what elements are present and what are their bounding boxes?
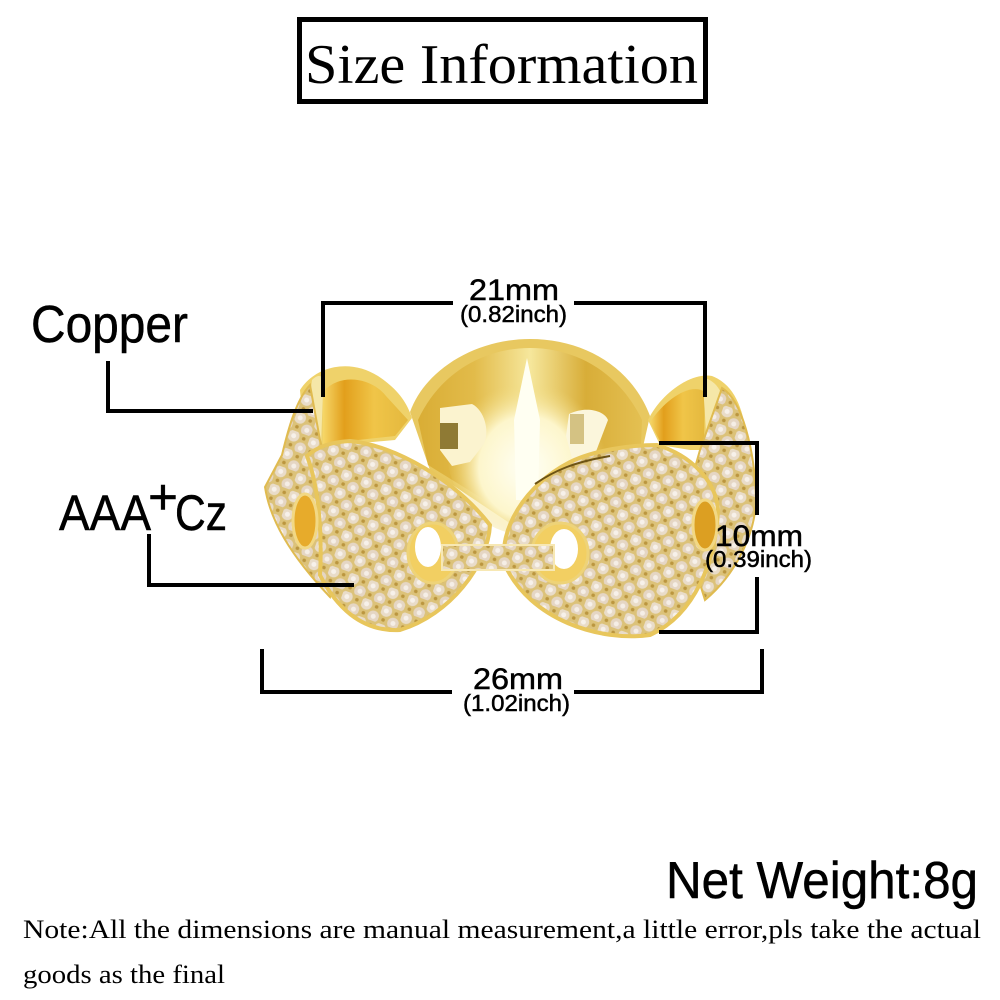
left side link hole [293, 494, 317, 548]
dimension: 21mm: (0.82inch) [460, 301, 567, 327]
large left link [307, 441, 490, 630]
note: Note:All the dimensions are manual measurement,a little error,pls take the actual [23, 915, 981, 944]
title: Size Information [305, 34, 698, 96]
left cream band [308, 376, 324, 452]
back band arch [410, 339, 650, 530]
left side link [265, 385, 345, 597]
dimension: 10mm: (0.39inch) [705, 546, 812, 572]
ring illustration [265, 339, 756, 636]
right rear link [648, 376, 748, 450]
right cream band [704, 378, 727, 462]
label: AAA+Cz: + [148, 469, 178, 525]
dimension: 26mm: (1.02inch) [463, 690, 570, 716]
label: Copper [31, 296, 313, 411]
right side link hole [693, 500, 717, 550]
dimension: 26mm: 26mm [473, 663, 563, 696]
label: AAA+Cz [59, 469, 354, 585]
inner knob left [440, 404, 486, 466]
dimension: 10mm: 10mm [715, 520, 803, 553]
dark setting line [535, 456, 610, 484]
label: AAA+Cz: Cz [175, 485, 227, 541]
dimension: 21mm: 21mm [469, 274, 559, 307]
label: AAA+Cz: AAA [59, 485, 152, 541]
inner knob right [566, 410, 608, 462]
ring interior [418, 348, 642, 525]
dimension: 21mm [323, 274, 705, 397]
dimension: 10mm [659, 443, 812, 632]
large left link hole [408, 523, 458, 583]
note: goods as the final [23, 960, 225, 989]
large right link [504, 445, 718, 636]
left rear link [300, 366, 412, 450]
centre bar [442, 545, 554, 570]
note [23, 915, 981, 989]
right side link [680, 388, 756, 600]
dimension: 26mm [262, 649, 762, 716]
inner light star [514, 358, 540, 500]
label: Copper: Copper [31, 296, 188, 354]
net weight: Net Weight:8g [666, 852, 978, 910]
large right link hole [532, 523, 588, 583]
